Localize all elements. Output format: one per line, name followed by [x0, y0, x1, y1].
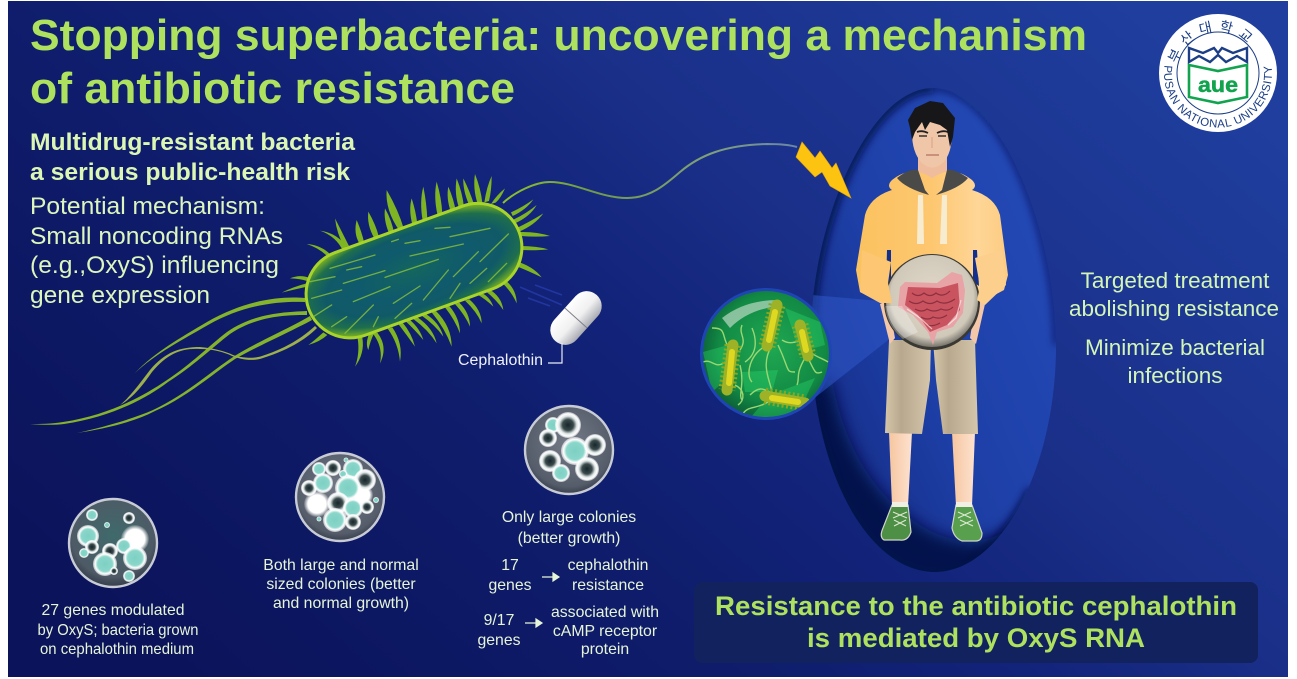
logo ring text: 부산대학교: [1168, 20, 1252, 62]
cephalothin pill: [458, 285, 608, 369]
subheading: public-health risk: Multidrug-resistant bacteria: [30, 129, 355, 156]
gene relation: 9/17 genes to cAMP receptor protein: associated with: [551, 604, 659, 621]
drawstrings: [917, 195, 924, 244]
person: [856, 101, 1008, 541]
sleeve cuffs over lens: [860, 250, 892, 303]
caption: dish 1: by OxyS; bacteria grown: [38, 622, 198, 639]
text block: potential mechanism: gene expression: [30, 282, 210, 309]
conclusion box: [694, 582, 1258, 663]
gene relation: 9/17 genes to cAMP receptor protein: cAMP receptor: [553, 623, 657, 640]
caption: dish 1: 27 genes modulated: [42, 602, 184, 619]
petri dish 2: [296, 453, 384, 541]
light beam from gut to microscope view: [812, 295, 889, 396]
pili: [282, 174, 550, 367]
bacterium body with pili: [282, 174, 550, 367]
leader line: [548, 343, 562, 363]
caption: dish 3: (better growth): [518, 530, 620, 547]
university logo: aue: [1198, 74, 1238, 97]
text block: potential mechanism: (e.g.,OxyS) influencing: [30, 252, 279, 279]
logo emblem: book: [1189, 65, 1247, 103]
petri dish 3: [525, 406, 613, 494]
gene relation: 17 genes to cephalothin resistance: [488, 557, 648, 594]
shoes: [881, 502, 982, 541]
hood lining: [897, 170, 929, 195]
text block: potential mechanism: Small noncoding RNAs: [30, 223, 283, 250]
caption: dish 2: and normal growth): [273, 595, 409, 612]
text block: potential mechanism: [30, 193, 283, 309]
rod bacteria: [727, 305, 808, 403]
logo emblem: wings: [1189, 48, 1247, 62]
subheading: public-health risk: a serious public-health risk: [30, 159, 350, 186]
gene relation: 9/17 genes to cAMP receptor protein: 9/17: [484, 612, 514, 629]
gut magnifier: [884, 254, 980, 350]
caption: dish 1: on cephalothin medium: [40, 641, 194, 658]
subheading: public-health risk: [30, 129, 355, 186]
petri dish 1: [69, 499, 157, 587]
gene relation: 9/17 genes to cAMP receptor protein: protein: [581, 641, 629, 658]
neck: [918, 155, 947, 196]
caption: dish 3: Only large colonies: [502, 509, 636, 526]
title: [30, 12, 1087, 113]
intestines: [885, 272, 965, 345]
right text: outcomes: [1069, 268, 1279, 388]
inner streaks: [310, 227, 508, 333]
eyes and mouth: [917, 131, 948, 133]
caption: dish 3: [502, 509, 636, 547]
text block: potential mechanism: Potential mechanism:: [30, 193, 265, 220]
bacterium flagella: [30, 298, 317, 433]
gene relation: 9/17 genes to cAMP receptor protein: genes: [477, 632, 521, 649]
caption: dish 2: Both large and normal: [263, 557, 419, 574]
title: Stopping superbacteria: uncovering a mechanism: [30, 12, 1087, 60]
university logo: PUSAN NATIONAL UNIVERSITY: [1164, 66, 1272, 128]
body ellipse around person: [790, 88, 1056, 578]
conclusion box: Resistance to the antibiotic cephalothin: [715, 591, 1237, 621]
shorts: [885, 340, 931, 434]
right text: outcomes: abolishing resistance: [1069, 296, 1279, 321]
gene relation: 17 genes to cephalothin resistance: genes: [488, 577, 532, 594]
caption: dish 2: [263, 557, 419, 612]
arrow: [542, 573, 559, 581]
flagella: [703, 325, 828, 415]
right text: outcomes: infections: [1127, 363, 1223, 388]
microscope view of bacteria: [700, 288, 832, 420]
legs: [889, 432, 912, 506]
hair: [908, 101, 955, 147]
gene relation: 17 genes to cephalothin resistance: resistance: [572, 577, 644, 594]
caption: dish 1: [38, 602, 198, 658]
title: of antibiotic resistance: [30, 65, 515, 113]
caption: dish 2: sized colonies (better: [266, 576, 416, 593]
arrow: [525, 619, 542, 627]
gaps between arms and torso: [886, 250, 979, 286]
right text: outcomes: Minimize bacterial: [1085, 335, 1265, 360]
motion streaks: [520, 285, 562, 306]
conclusion box: is mediated by OxyS RNA: [807, 623, 1145, 653]
gene relation: 17 genes to cephalothin resistance: cephalothin: [568, 557, 648, 574]
label: Cephalothin: [458, 352, 543, 369]
right text: outcomes: Targeted treatment: [1081, 268, 1270, 293]
gene relation: 9/17 genes to cAMP receptor protein: [477, 604, 659, 658]
hoodie: [856, 171, 1008, 305]
hands: [880, 300, 985, 344]
university logo: [1159, 14, 1277, 132]
lightning bolt: [796, 142, 851, 198]
capsule: [294, 191, 534, 350]
face: [912, 108, 952, 168]
flagellum reaching the lightning bolt: [503, 144, 797, 203]
gene relation: 17 genes to cephalothin resistance: 17: [501, 557, 519, 574]
